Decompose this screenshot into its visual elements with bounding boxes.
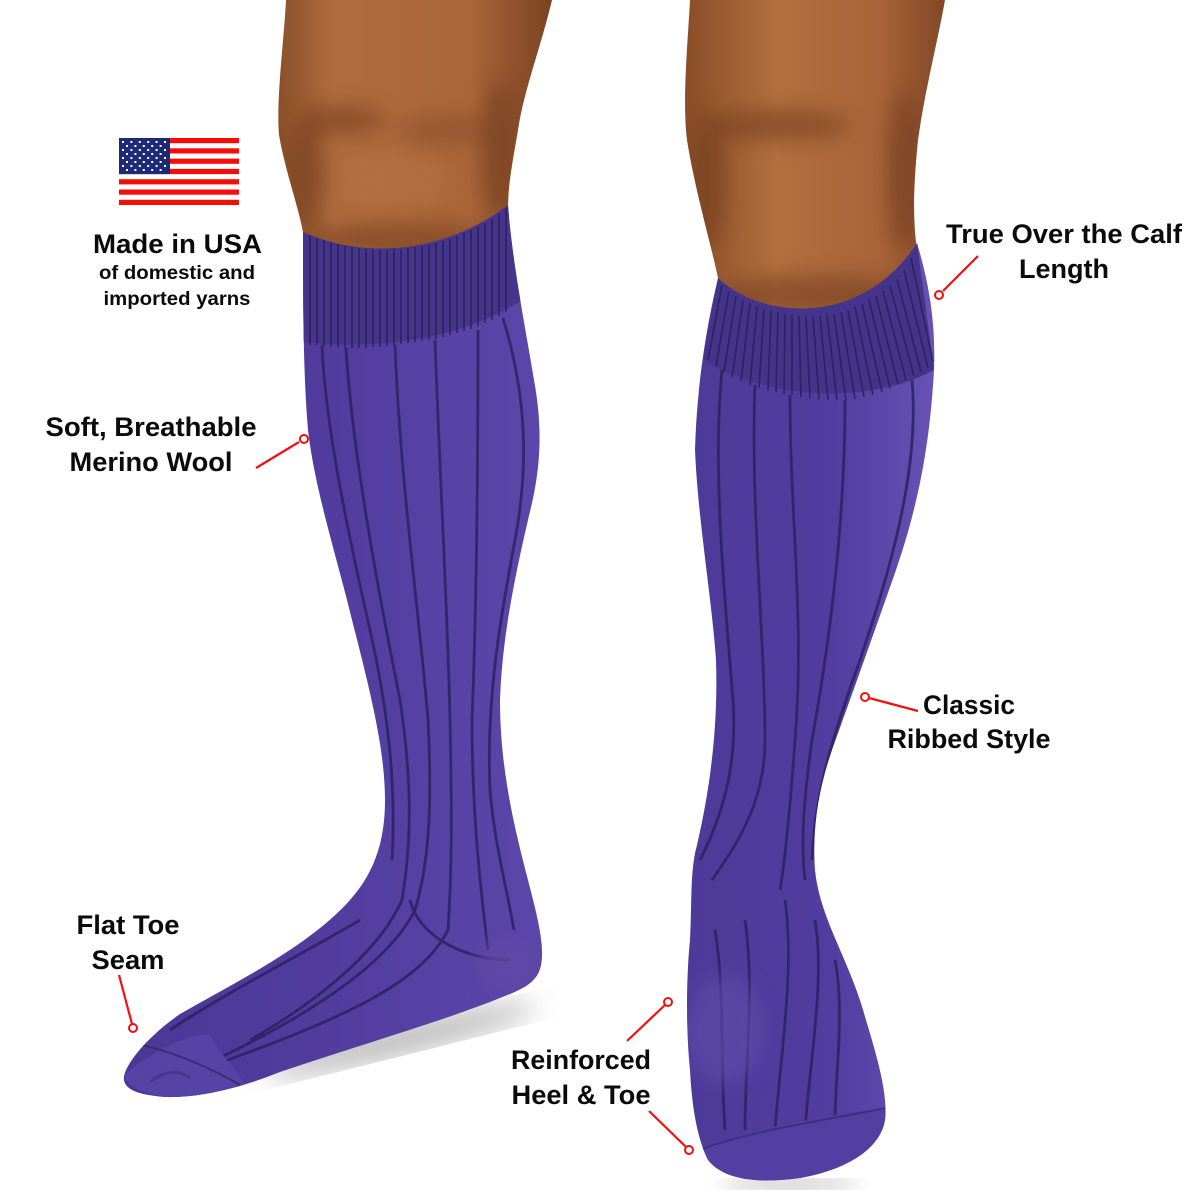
callout: Classic Ribbed Style (861, 690, 1050, 754)
heel tone (476, 935, 544, 995)
callout: True Over the Calf Length (935, 219, 1182, 299)
right sock (685, 243, 934, 1190)
ribs (700, 370, 913, 1130)
callout: Classic Ribbed Style: Ribbed Style (888, 724, 1050, 754)
text: Made in USA: Made in USA (93, 229, 262, 259)
floor shadows (261, 994, 860, 1189)
heel tone (685, 975, 765, 1085)
callout: Classic Ribbed Style: Classic (923, 690, 1015, 720)
callout: Reinforced Heel & Toe (511, 998, 693, 1154)
callout: Flat Toe Seam (76, 910, 180, 1032)
ribs (170, 318, 524, 1070)
left leg skin (278, 0, 552, 248)
callout: Flat Toe Seam: Seam (92, 945, 164, 975)
callout: True Over the Calf Length: Length (1019, 254, 1109, 284)
left sock (124, 205, 544, 1097)
callout: Soft, Breathable Merino Wool (46, 412, 308, 477)
text: Made in USA: of domestic and (99, 263, 255, 284)
callout: Reinforced Heel & Toe: Heel & Toe (512, 1080, 650, 1110)
text: Made in USA (93, 229, 262, 310)
cuff (303, 205, 522, 345)
callout: Soft, Breathable Merino Wool: Soft, Breathable (46, 412, 256, 442)
text: Made in USA: imported yarns (104, 289, 250, 310)
callout: Reinforced Heel & Toe: Reinforced (511, 1045, 651, 1075)
toe band (703, 1108, 886, 1180)
knee shading (690, 90, 923, 315)
right leg skin (685, 0, 945, 335)
knee shading (287, 80, 518, 256)
cuff (703, 243, 934, 393)
icon: US flag (119, 138, 239, 205)
callout: Flat Toe Seam: Flat Toe (76, 910, 180, 940)
callout: Soft, Breathable Merino Wool: Merino Wool (70, 447, 232, 477)
toe band (124, 1035, 245, 1097)
callout: True Over the Calf Length: True Over the Calf (946, 219, 1182, 249)
